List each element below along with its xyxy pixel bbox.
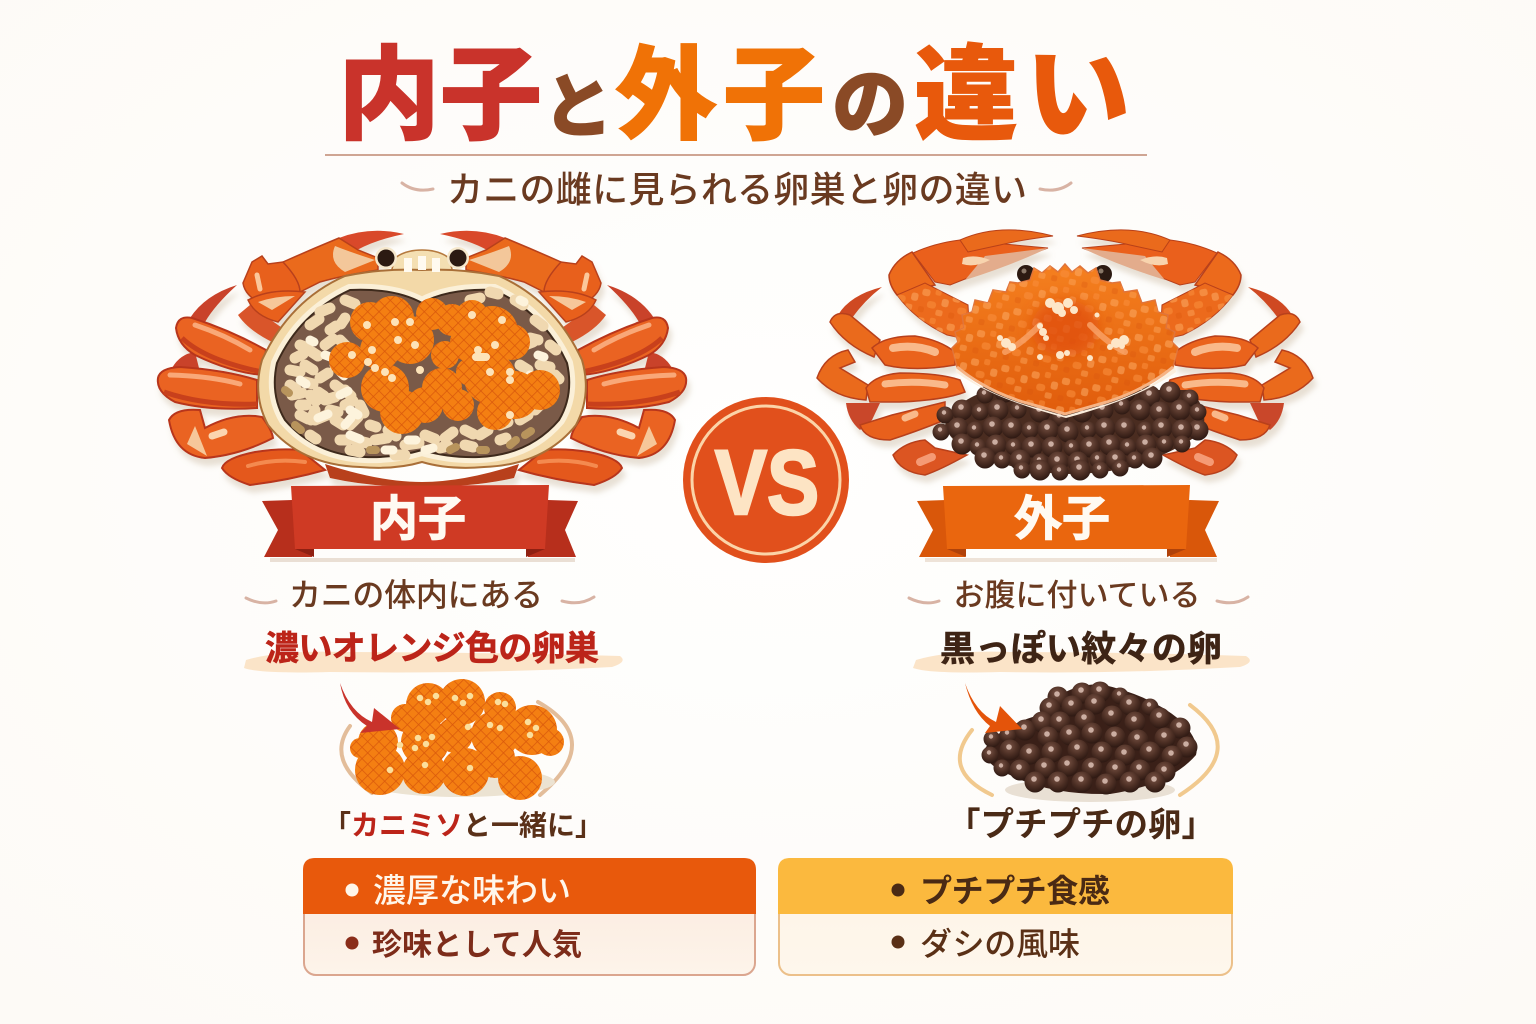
text: カニの体内にある: カニの体内にある: [289, 577, 543, 613]
header row: [303, 858, 756, 914]
crab eyes: [1017, 265, 1112, 283]
banner: 内子: [262, 485, 578, 562]
caption: カニミソと一緒に: 「カニミソと一緒に」: [323, 810, 603, 841]
crab shell: [952, 264, 1178, 418]
plate: [341, 702, 572, 795]
VS badge: VS: [715, 432, 819, 534]
arrow: [340, 683, 400, 733]
title: い: [1026, 38, 1130, 154]
egg mass: [932, 382, 1208, 480]
title: 外子: [615, 39, 825, 153]
feature: 珍味として人気: 珍味として人気: [372, 929, 582, 962]
caption: プチプチの卵: 「プチプチの卵」: [947, 807, 1215, 844]
feature: 濃厚な味わい: 濃厚な味わい: [373, 872, 571, 909]
illustration: left crab with open shell: [158, 231, 686, 486]
shell cavity: [275, 290, 569, 457]
highlight: 濃いオレンジ色の卵巣: 濃いオレンジ色の卵巣: [265, 630, 599, 668]
kani miso grains: [290, 292, 559, 455]
header row: [778, 858, 1233, 914]
illustration: roe on plate: [340, 679, 572, 800]
title: 違: [914, 38, 1018, 154]
VS badge: [683, 397, 849, 563]
crab head: [389, 250, 455, 280]
panel: 内子 features: [303, 858, 756, 975]
title: [338, 38, 1130, 154]
roe mound: [350, 679, 564, 800]
text: お腹に付いている: お腹に付いている: [954, 578, 1200, 613]
feature: ダシの風味: ダシの風味: [920, 926, 1080, 962]
panel: 外子 features: [778, 858, 1233, 975]
title: 内子: [338, 39, 542, 153]
banner: 外子: 外子: [1014, 493, 1110, 546]
illustration: eggs on plate: [960, 682, 1218, 802]
egg pile: [982, 682, 1198, 794]
crab eyes: [375, 247, 469, 269]
banner: 内子: 内子: [370, 493, 466, 546]
subtitle: カニの雌に見られる卵巣と卵の違い: [447, 169, 1027, 210]
crab legs and claws: [158, 231, 686, 486]
orange roe: [329, 296, 560, 434]
crab shell: [258, 270, 586, 468]
plate: [960, 705, 1218, 795]
feature: プチプチ食感: プチプチ食感: [920, 873, 1110, 909]
banner: 外子: [917, 485, 1219, 562]
arrow: [965, 683, 1022, 733]
title: と: [543, 68, 613, 146]
highlight: 黒っぽい紋々の卵: 黒っぽい紋々の卵: [940, 629, 1222, 669]
illustration: right crab with eggs: [817, 230, 1313, 480]
title rule: [325, 154, 1147, 156]
crab legs and claws: [817, 230, 1313, 475]
title: の: [832, 63, 908, 148]
